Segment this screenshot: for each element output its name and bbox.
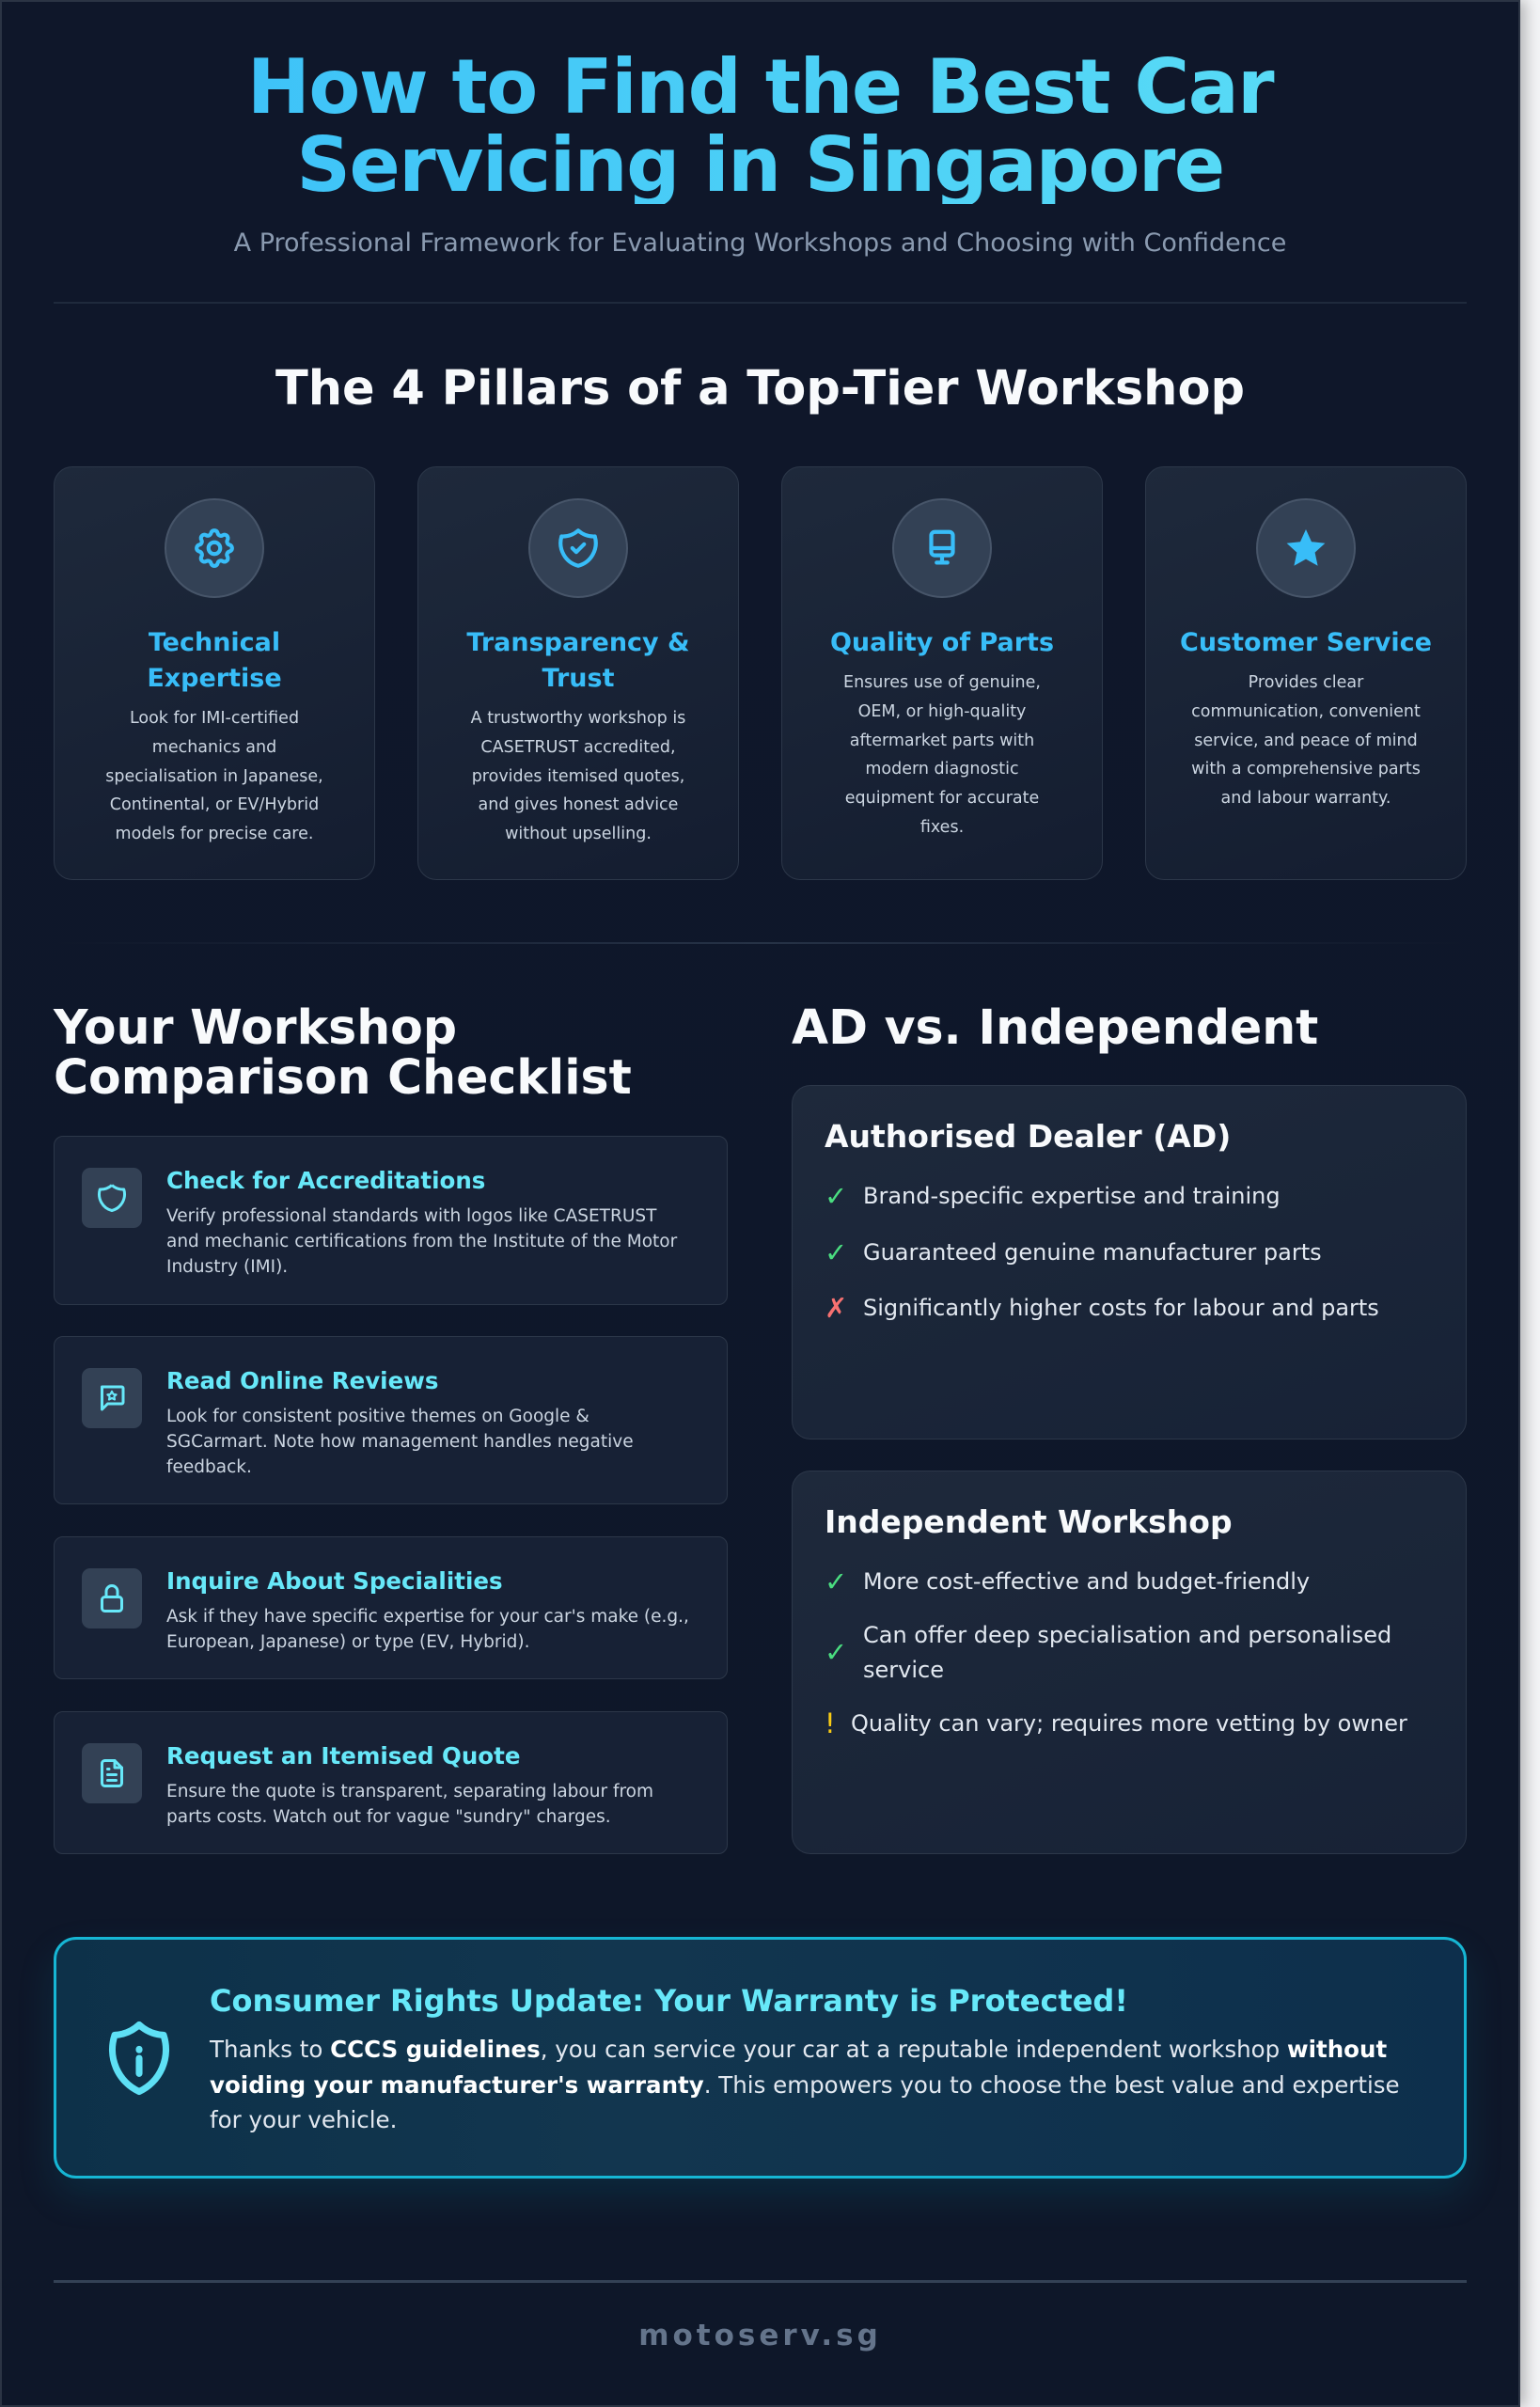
icon: lock xyxy=(82,1568,142,1628)
heading: checklist: Comparison Checklist xyxy=(54,1049,632,1105)
panel: independent workshop: ✓ xyxy=(825,1636,847,1668)
icon: device xyxy=(892,498,992,598)
title: How to Find the Best Car xyxy=(247,43,1273,131)
panel: pillar technical expertise xyxy=(54,466,375,880)
panel: independent workshop: ! xyxy=(825,1707,836,1739)
pillar title: Quality of Parts xyxy=(830,628,1054,657)
panel: authorised dealer: Guaranteed genuine manufacturer parts xyxy=(863,1239,1322,1266)
checklist: reviews: Look for consistent positive themes on Google & SGCarmart. Note how management handles negative feedback. xyxy=(166,1407,634,1477)
heading: AD vs independent: AD vs. Independent xyxy=(792,999,1318,1055)
checklist: itemised quote: Request an Itemised Quote xyxy=(166,1742,520,1770)
pillar title: Technical xyxy=(149,628,280,657)
callout: consumer rights xyxy=(54,1937,1467,2179)
checklist: accreditations: Verify professional standards with logos like CASETRUST and mechanic certifications from the Institute of the Motor Industry (IMI). xyxy=(166,1206,677,1277)
checklist: accreditations xyxy=(54,1136,728,1305)
pillar text: Ensures use of genuine, OEM, or high-quality aftermarket parts with modern diagnostic equipment for accurate fixes. xyxy=(843,673,1041,837)
panel: independent workshop: Can offer deep specialisation and personalised service xyxy=(863,1621,1391,1683)
panel: independent workshop: Independent Workshop xyxy=(825,1503,1233,1540)
checklist: specialities: Inquire About Specialities xyxy=(166,1567,503,1595)
checklist: itemised quote: Ensure the quote is transparent, separating labour from parts costs. Watch out for vague "sundry" charges. xyxy=(166,1782,653,1827)
panel: independent workshop: More cost-effective and budget-friendly xyxy=(863,1568,1310,1595)
icon: document xyxy=(82,1743,142,1803)
checklist: itemised quote xyxy=(54,1711,728,1854)
panel: independent workshop: ✓ xyxy=(825,1565,847,1597)
panel: authorised dealer: Authorised Dealer (AD) xyxy=(825,1118,1231,1155)
footer brand: motoserv.sg xyxy=(638,2319,882,2352)
title: Servicing in Singapore xyxy=(296,121,1224,209)
panel: authorised dealer: Brand-specific expertise and training xyxy=(863,1183,1281,1209)
icon: shield xyxy=(82,1168,142,1228)
icon: star xyxy=(1256,498,1356,598)
panel: pillar quality of parts xyxy=(781,466,1103,880)
checklist: specialities xyxy=(54,1536,728,1679)
checklist: specialities: Ask if they have specific expertise for your car's make (e.g., European, Japanese) or type (EV, Hybrid). xyxy=(166,1607,689,1652)
panel: authorised dealer xyxy=(792,1085,1467,1439)
pillar title: Trust xyxy=(542,664,614,693)
icon: review chat xyxy=(82,1368,142,1428)
heading: 4 pillars: The 4 Pillars of a Top-Tier Workshop xyxy=(275,361,1245,417)
panel: authorised dealer: ✓ xyxy=(825,1235,847,1267)
checklist: reviews: Read Online Reviews xyxy=(166,1367,438,1394)
icon: gear xyxy=(165,498,264,598)
pillar title xyxy=(147,628,282,693)
callout text: Thanks to CCCS guidelines, you can service your car at a reputable independent workshop without voiding your manufacturer's warranty. This empowers you to choose the best value and expertise for your vehicle. xyxy=(210,2036,1400,2133)
title xyxy=(0,48,1520,204)
checklist: accreditations: Check for Accreditations xyxy=(166,1167,485,1194)
panel: independent workshop xyxy=(792,1471,1467,1854)
checklist: reviews xyxy=(54,1336,728,1504)
pillar text: Look for IMI-certified mechanics and specialisation in Japanese, Continental, or EV/Hybrid models for precise care. xyxy=(105,709,323,843)
pillar text: Provides clear communication, convenient service, and peace of mind with a comprehensive parts and labour warranty. xyxy=(1191,673,1421,808)
callout title: Consumer Rights Update: Your Warranty is Protected! xyxy=(210,1983,1128,2019)
panel: authorised dealer: ✓ xyxy=(825,1180,847,1212)
pillar title: Customer Service xyxy=(1180,628,1432,657)
panel: independent workshop: Quality can vary; requires more vetting by owner xyxy=(851,1709,1407,1736)
icon: shield check xyxy=(528,498,628,598)
panel: pillar customer service xyxy=(1145,466,1467,880)
heading: checklist xyxy=(53,999,632,1105)
subtitle: A Professional Framework for Evaluating Workshops and Choosing with Confidence xyxy=(234,228,1286,258)
panel: authorised dealer: ✗ xyxy=(825,1292,847,1324)
panel: authorised dealer: Significantly higher costs for labour and parts xyxy=(863,1295,1379,1321)
pillar title: Expertise xyxy=(147,664,282,693)
panel: pillar transparency xyxy=(417,466,739,880)
pillar text: A trustworthy workshop is CASETRUST accredited, provides itemised quotes, and gives honest advice without upselling. xyxy=(471,709,685,843)
heading: checklist: Your Workshop xyxy=(54,999,457,1055)
pillar title xyxy=(466,628,690,693)
pillar title: Transparency & xyxy=(466,628,690,657)
icon: shield info xyxy=(109,2022,169,2095)
